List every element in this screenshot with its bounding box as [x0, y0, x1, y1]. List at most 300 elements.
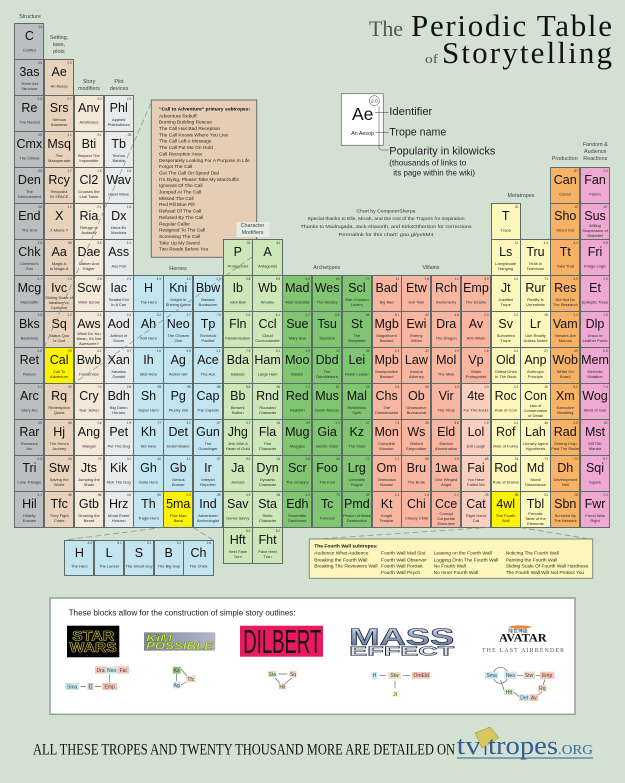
element: The Lancer: 5.1	[117, 541, 122, 545]
element: Development Hell: Hell	[562, 482, 569, 487]
element: The Climax: .05	[38, 133, 42, 137]
element: Law of Conservation of Detail: of Detail	[528, 412, 543, 417]
element: Lampshade Hanging: Ls	[499, 245, 512, 259]
element: Shout Out: Shout Out	[556, 228, 574, 233]
element: Pet The Dog: Pet The Dog	[108, 444, 130, 449]
element: Hand Wave: Hand Wave	[108, 192, 129, 197]
element: Squick: 5.7	[603, 457, 608, 461]
element: Gentle Giant: 1.3	[335, 421, 340, 425]
element: Kick The Dog: Kick The Dog	[107, 480, 131, 485]
element: Applied Phlebotinum: 2.3	[127, 97, 131, 101]
title: of	[425, 51, 439, 66]
element: Hilarity Ensues	[14, 491, 44, 528]
credits: Thanks to Madrugada, Jack Alsworth, and KirksOtherSon for corrections	[300, 224, 472, 230]
element: Serious Business: Srs	[50, 101, 69, 115]
panel: plot devices column	[104, 95, 134, 528]
element: The Masquerade: The	[56, 153, 63, 158]
element: Viewers Are Morons: Morons	[559, 338, 572, 343]
element: Periodic Table of the Elements: .01	[544, 493, 548, 497]
element: Rounded Character: Rnd	[256, 389, 279, 403]
element: Deus Ex Machina: Deus Ex	[111, 225, 126, 230]
element: Cloud Cuckoolander: Ccl	[259, 317, 277, 331]
element: The Klutz	[342, 419, 372, 456]
element: Badass: Badass	[231, 372, 244, 377]
element: Wind Scrow: Wind Scrow	[78, 300, 100, 305]
element: Badass Bookworm: Bbw	[196, 281, 220, 295]
element: The Dragon	[431, 311, 461, 348]
element: Romance Arc: .05	[38, 421, 42, 425]
element: Canon: Can	[554, 173, 577, 187]
element: Reality Is Unrealistic: Rur	[525, 281, 546, 295]
element: The Big Guy: 5.1	[177, 541, 181, 545]
element: Action Girl: 5.0	[186, 349, 191, 353]
element: Static Character: Character	[259, 518, 276, 523]
element: Screwed By The Network	[550, 491, 580, 528]
element: Genius Bruiser: 1.1	[186, 457, 191, 461]
element: Love Triangle	[14, 455, 44, 492]
heading: Fandom and Audience Reactions	[583, 142, 608, 162]
element: The Reveal: Re	[21, 101, 37, 115]
element: Static Character: Sta	[258, 497, 277, 511]
element: The Chick: Ch	[190, 546, 206, 560]
element: Fridge Logic: Fridge Logic	[584, 264, 606, 269]
element: Idiot Ball: 3.8	[246, 277, 250, 281]
element: Star-Crossed Lovers: Star-Crossed	[345, 297, 369, 302]
element: Hand Wave	[104, 167, 134, 204]
element: The Masquerade	[44, 131, 74, 168]
element: Applied Phlebotinum: Phl	[110, 101, 128, 115]
element: Genius Bruiser: Gb	[170, 461, 187, 475]
element: Hilarity Ensues: 4.1	[38, 493, 42, 497]
panel: fandom and audience reactions	[580, 167, 610, 528]
element: Cloud Cuckoolander: 6.1	[276, 313, 280, 317]
element: Big Damn Heroes: Big Damn	[110, 405, 127, 410]
outline diagram: Dilbert: Hil	[279, 684, 285, 690]
element: Plucky Girl: .95	[186, 385, 191, 389]
element: Jerkass: Ja	[231, 461, 244, 475]
element: Conflict: C	[25, 29, 34, 43]
element: Magic A Is Magic A: Aa	[52, 245, 67, 259]
element: The Scrappy: Scr	[288, 461, 307, 475]
element: Oldest Ones In The Book: In The Book	[495, 374, 516, 379]
element: Oldest Ones In The Book: 3.1	[514, 349, 518, 353]
element: Technical Pacifist: Tp	[201, 317, 215, 331]
element: The Denouement: .05	[38, 169, 42, 173]
element: Subverted Trope: Subverted	[497, 333, 515, 338]
element: MacGuffin: Mcg	[18, 281, 41, 295]
element: The End: .06	[38, 205, 42, 209]
element: Ensemble Darkhorse: 4.0	[305, 493, 310, 497]
element: Complete Monster: Mon	[374, 425, 399, 439]
element: Gentle Giant	[312, 419, 342, 456]
element: Villain Protagonist	[461, 347, 491, 384]
element: Heel Face Turn: Heel Face	[229, 549, 247, 554]
element: Truth in Television: Tru	[526, 245, 545, 259]
element: Omnicidal Maniac: Om	[377, 461, 397, 475]
element: Artifact of Doom: Aod	[108, 317, 130, 331]
element: Wangst: Ang	[78, 425, 100, 439]
element: Wicked Stepmother: .26	[425, 421, 429, 425]
element: Creepy Child: Chi	[407, 497, 426, 511]
element: Status Quo Is God: Is God	[53, 338, 65, 343]
element: The Fourth Wall (highlighted): .98	[514, 493, 518, 497]
heading: Story modifiers: modifiers	[78, 86, 100, 92]
element: Magnificent Bastard: Magnificent	[376, 333, 397, 338]
outline diagram: Avatar: Hft	[506, 690, 513, 696]
element: Idiot Hero: 1.6	[157, 349, 161, 353]
panel: Fourth Wall subtropes: No Inner Fourth Wall	[434, 570, 478, 576]
element: The Scrappy	[282, 455, 312, 492]
element: The Virus: Vir	[439, 389, 454, 403]
element: An Aesop: 2.0	[67, 61, 72, 65]
outline diagram: Avatar: Det	[520, 696, 529, 702]
element: Anti-Villain: Anti-Villain	[466, 336, 485, 341]
element: Flanderization: Flanderization	[225, 336, 250, 341]
element: Big Damn Heroes: 2.8	[127, 385, 131, 389]
element: Refuge of Audacity: 2.1	[97, 205, 102, 209]
element: Three Act Structure: .05	[38, 61, 42, 65]
element: The Hero: 4.9	[88, 541, 92, 545]
element: Anthropic Principle: Anp	[524, 353, 547, 367]
element: Wind Scrow: 3.8	[97, 277, 102, 281]
element: The Dumbledore: .23	[335, 349, 340, 353]
element: Villain Protagonist: Protagonist	[466, 374, 486, 379]
element: Person of Mass Destruction	[342, 491, 372, 528]
element: The Smart Guy: S	[135, 546, 143, 560]
element: Redshirt	[282, 383, 312, 420]
element: The End: The End	[22, 228, 37, 233]
element: Face Heel Turn: Turn	[264, 554, 272, 559]
element: Tear Jerker: 7.4	[97, 385, 102, 389]
element: Knight Templar: Knight	[381, 513, 392, 518]
element: Creepy Child	[401, 491, 431, 528]
element: Reality Is Unrealistic: .74	[544, 277, 548, 281]
outline diagram: Avatar: Rq	[539, 686, 546, 692]
panel: setting, laws, plots column	[44, 59, 74, 528]
element: Freud Was Right: Right	[590, 518, 600, 523]
element: The Chessmaster: Chessmaster	[375, 410, 398, 415]
element: Saving the World: Stw	[49, 461, 70, 475]
element: Freud Was Right: Freud Was	[585, 513, 605, 518]
element: The Ace: Ace	[197, 353, 219, 367]
element: Big Damn Heroes: Bdh	[108, 389, 130, 403]
element: Screwed By The Network: Sbn	[554, 497, 576, 511]
element: Big Bad: Big Bad	[380, 300, 394, 305]
element: Anthropic Principle	[520, 347, 551, 384]
element: Fanservice: 4.1	[97, 349, 102, 353]
element: Magnificent Bastard: 5.1	[395, 313, 399, 317]
element: Jerkass: 9.0	[246, 457, 250, 461]
element: Gentle Giant: Gentle Giant	[316, 444, 338, 449]
panel: Call to Adventure subtropes: I'm Dying, Please Take My MacGuffin	[159, 177, 239, 183]
element: Wicked Stepmother: Ws	[407, 425, 425, 439]
element: Archenemy	[431, 275, 461, 312]
element: Conflict: Conflict	[23, 48, 36, 53]
legend: how to read an element: 2.0	[371, 98, 378, 104]
element: Wangst: 1.6	[97, 421, 102, 425]
element: MacGuffin: MacGuffin	[20, 300, 38, 305]
panel: production	[550, 167, 580, 528]
element: Darker And Edgier: Dae	[77, 245, 100, 259]
element: The Wesley: .80	[335, 277, 340, 281]
outline diagram: Avatar: Neo	[506, 673, 515, 679]
element: Badass	[223, 347, 253, 384]
element: Mooks: 3.9	[305, 349, 310, 353]
element: The Fool: The Fool	[319, 480, 335, 485]
element: Super Hero: .95	[157, 385, 161, 389]
element: The Hero's Journey: Hj	[53, 425, 65, 439]
element: The Ace: 1.1	[216, 349, 221, 353]
element: Cloud Cuckoolander: Cloud	[262, 333, 273, 338]
element: Crosses the Line Twice: 1.5	[97, 169, 102, 173]
element: Flat Character: .04	[276, 421, 280, 425]
element: Getting Crap Past The Radar	[550, 419, 580, 456]
element: Artifact of Doom: Doom	[113, 338, 124, 343]
element: Big Bad: 11	[396, 277, 399, 281]
element: Kick The Dog: Kik	[110, 461, 127, 475]
element: Backstory	[14, 311, 44, 348]
element: Jumping the Shark: Jts	[81, 461, 97, 475]
element: The Virus: 1.2	[454, 385, 459, 389]
element: Creepy Child: Creepy Child	[405, 516, 428, 521]
element: Serious Business: 2.7	[67, 97, 72, 101]
element: Sliding Scale of Idealism vs. Cynicism: Cynicism	[51, 304, 67, 309]
element: Face Heel Turn: Fht	[259, 533, 277, 547]
logo: Dilbert	[240, 623, 323, 660]
element: Antagonist: Antagonist	[258, 264, 277, 269]
heading: Villains: Villains	[423, 265, 439, 271]
element: Mad Scientist	[282, 275, 312, 312]
element: Writer On Board: Board	[560, 374, 571, 379]
element: Five Man Band (highlighted): Five Man	[170, 513, 186, 518]
heading: Plot devices	[110, 78, 128, 92]
panel: Fourth Wall subtropes: Logging Onto The Fourth Wall	[434, 557, 498, 563]
element: Fridge Logic: 5.8	[603, 241, 608, 245]
element: You Have Failed Me: You Have	[467, 477, 485, 482]
element: Viewers Are Morons: Vam	[553, 317, 578, 331]
element: Jumping the Shark	[74, 455, 104, 492]
element: Guile Hero: .40	[157, 457, 161, 461]
element: Knight Templar: Templar	[380, 518, 394, 523]
panel: Fourth Wall subtropes: Painting the Fourth Wall	[506, 557, 557, 563]
element: Squick: Sqi	[586, 461, 604, 475]
element: Love Triangle: Tri	[22, 461, 36, 475]
element: What Do You Mean, It's Not Awesome?: 2.1	[97, 313, 102, 317]
element: Crosses the Line Twice: Crosses the	[78, 189, 100, 194]
element: Right Hand Cat	[461, 491, 491, 528]
element: Willing Suspension of Disbelief: Sus	[584, 209, 606, 223]
element: Badass Bookworm	[193, 275, 223, 312]
element: Take That: Take That	[556, 264, 574, 269]
element: Idiot Ball: Idiot Ball	[230, 300, 245, 305]
element: Crosses the Line Twice	[74, 167, 104, 204]
element: Intrepid Reporter: Intrepid	[201, 477, 215, 482]
element: Star-Crossed Lovers	[342, 275, 372, 312]
element: Call To Adventure (highlighted): Adventure	[50, 374, 68, 379]
element: Word of God: Word of God	[584, 408, 606, 413]
logo: TV Tropes with lamp: .ORG	[558, 743, 593, 758]
element: MST3K Mantra	[580, 419, 610, 456]
element: Literary Agent Hypothesis	[520, 419, 551, 456]
element: Protagonist	[223, 239, 253, 276]
element: The Chessmaster: 2.8	[395, 385, 399, 389]
element: Enemy Within: Ewi	[406, 317, 426, 331]
outline diagram: Avatar: Sma	[487, 673, 497, 679]
element: Three Act Structure: Structure	[21, 86, 38, 91]
element: Static Character	[252, 491, 283, 528]
element: Muggles: Muggles	[290, 444, 305, 449]
element: Large Ham: Ham	[254, 353, 281, 367]
element: Literary Agent Hypothesis: Literary Agent	[523, 441, 548, 446]
element: Moral Event Horizon: Moral Event	[108, 513, 129, 518]
element: Magic A Is Magic A: Is Magic A	[50, 266, 68, 271]
element: Big Bad: Bad	[376, 281, 398, 295]
element: One Winged Angel	[431, 455, 461, 492]
panel: Call to Adventure subtropes: Desperately Looking For A Purpose In Life	[159, 158, 250, 164]
element: Refuge of Audacity: Audacity	[81, 230, 97, 235]
element: The Hero's Journey: The Hero's	[49, 441, 69, 446]
element: Static Character: Static	[263, 513, 273, 518]
element: The Denouement: Dénouement	[18, 194, 41, 199]
element: Badass Bookworm: Bookworm	[199, 302, 217, 307]
element: Darker And Edgier: Darker And	[79, 261, 99, 266]
element: Determinator: 3.1	[186, 421, 191, 425]
panel: character modifiers	[223, 239, 283, 564]
element: Saving the World: World	[54, 482, 64, 487]
element: Dynamic Character	[252, 455, 283, 492]
element: Conflict: .24	[38, 25, 42, 29]
element: Idiot Hero	[133, 347, 164, 384]
element: Recycled IN SPACE	[44, 167, 74, 204]
element: Word of God: Wog	[582, 389, 608, 403]
element: Protagonist: Protagonist	[228, 264, 248, 269]
element: Viewers Are Morons: 1.1	[573, 313, 578, 317]
element: Obstructive Bureaucrat: Obstructive	[406, 405, 426, 410]
element: Justified Trope: 4.2	[514, 277, 518, 281]
element: Sealed Evil In A Can: 2.1	[127, 277, 131, 281]
element: Complete Monster: Monster	[379, 446, 394, 451]
element: Beyond The Impossible: Impossible	[79, 158, 98, 163]
element: Rule of Cool: Rule of Cool	[495, 408, 517, 413]
element: Jumping the Shark: Jumping the	[78, 477, 100, 482]
element: Jerkass	[223, 455, 253, 492]
heading: Fandom and Audience Reactions: Audience	[584, 149, 607, 155]
element: Corrupt Corporate Executive: Executive	[437, 520, 455, 525]
panel: structure column	[14, 23, 44, 528]
element: MacGuffin	[14, 275, 44, 312]
element: Oldest Ones In The Book: Oldest Ones	[495, 369, 517, 374]
element: Truth in Television: Television	[527, 266, 544, 271]
element: Call To Adventure (highlighted): .29	[67, 349, 72, 353]
element: Writer On Board: Wob	[552, 353, 578, 367]
element: The Hero's Journey: Journey	[52, 446, 66, 451]
element: Five Man Band (highlighted)	[163, 491, 193, 528]
element: Status Quo Is God	[44, 311, 74, 348]
element: Justified Trope: Trope	[501, 302, 511, 307]
element: Pet The Dog: 1.9	[127, 421, 131, 425]
element: Super Hero: Super Hero	[138, 408, 159, 413]
element: Trope: T	[502, 209, 510, 223]
panel: story outlines	[50, 598, 575, 714]
element: X Meets Y	[44, 203, 74, 240]
outline diagram: Kim Possible: Ag	[174, 683, 180, 689]
element: Technical Pacifist: Pacifist	[202, 338, 214, 343]
element: Face Heel Turn	[252, 527, 283, 564]
element: Genius Bruiser	[163, 455, 193, 492]
element: Person of Mass Destruction: Person of Mass	[343, 513, 371, 518]
element: Law of Conservation of Detail: Conservation	[524, 408, 547, 413]
element: Star-Crossed Lovers: .77	[365, 277, 369, 281]
logo: Star Wars	[67, 626, 119, 657]
element: Big Bad	[372, 275, 402, 312]
panel: Fourth Wall subtropes: Audience What Audience	[314, 551, 369, 557]
element: The Empire: The Empire	[466, 300, 486, 305]
element: Badass: 7.9	[246, 349, 250, 353]
heading: Character Modifiers	[236, 222, 269, 237]
element: What Do You Mean, It's Not Awesome?: What Do You	[77, 331, 101, 336]
element: Beyond The Impossible	[74, 131, 104, 168]
element: Like Reality Unless Noted: Lr	[530, 317, 541, 331]
element: Growing the Beard: Growing the	[78, 513, 100, 518]
element: For The Evulz: 4te	[467, 389, 485, 403]
element: Tragic Hero: Th	[141, 497, 156, 511]
element: Draco in Leather Pants: Draco in	[588, 333, 602, 338]
panel: Call to Adventure subtropes: Missed The Call	[159, 196, 194, 202]
element: Evil Twin: 1.6	[425, 277, 429, 281]
element: Rule of Drama: .31	[514, 457, 518, 461]
element: Knight in Shining Armor: Shining Armor	[166, 302, 191, 307]
element: Deus Ex Machina: Machina	[111, 230, 126, 235]
element: Static Character: .06	[276, 493, 280, 497]
element: Kick The Dog: 3.1	[127, 457, 131, 461]
element: Applied Phlebotinum	[104, 95, 134, 132]
element: Sealed Evil In A Can: In A Can	[111, 302, 126, 307]
element: Rebellious Spirit: Spirit	[352, 410, 361, 415]
element: Jerk With A Heart of Gold: Heart of Gold	[226, 446, 250, 451]
element: Determinator	[163, 419, 193, 456]
element: The End	[14, 203, 44, 240]
element: Action Girl: Ag	[171, 353, 186, 367]
element: Growing the Beard: .86	[97, 493, 102, 497]
element: Shout Out: 10	[574, 205, 578, 209]
element: Wangst	[74, 419, 104, 456]
element: Knight Templar: Kt	[381, 497, 393, 511]
heading: Archetypes: Archetypes	[313, 265, 340, 271]
element: Genre Savvy	[223, 491, 253, 528]
element: The Chick	[183, 540, 214, 576]
element: Three Act Structure: Three Act	[21, 81, 38, 86]
element: The Virus: The Virus	[438, 408, 455, 413]
panel: heroes	[134, 275, 223, 528]
heading: Setting, laws, plots: plots	[53, 49, 65, 55]
element: Lampshade Hanging: 12	[515, 241, 518, 245]
element: Crosses the Line Twice: Line Twice	[80, 194, 98, 199]
element: Gentle Giant: Gia	[317, 425, 337, 439]
element: Sliding Scale of Idealism vs. Cynicism	[44, 275, 74, 312]
element: Tsundere: Tsundere	[319, 336, 335, 341]
element: Rule of Cool: Roc	[495, 389, 517, 403]
panel: Call to Adventure subtropes	[151, 100, 257, 257]
panel: Call to Adventure subtropes: Ignorant Of The Call	[159, 183, 203, 189]
element: Flat Character	[252, 419, 283, 456]
element: Darker And Edgier: Edgier	[83, 266, 95, 271]
logo: TV Tropes with lamp	[457, 727, 593, 760]
element: The Fourth Wall (highlighted): The Fourth	[496, 513, 515, 518]
element: Anti Hero	[133, 311, 164, 348]
element: Memetic Mutation	[580, 347, 610, 384]
element: Anvilicious: 3.0	[97, 97, 102, 101]
element: One Winged Angel: 1.9	[454, 457, 459, 461]
